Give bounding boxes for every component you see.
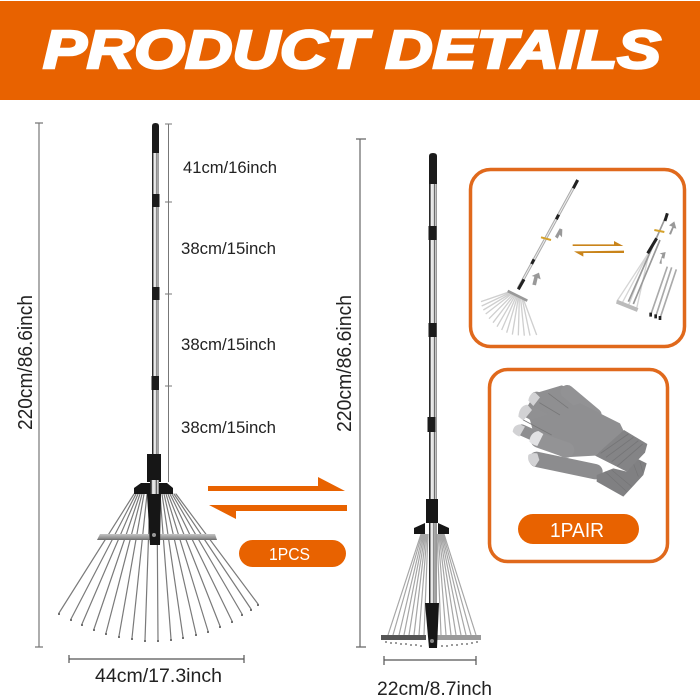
section dimension line <box>165 124 172 482</box>
width dimension 22cm <box>377 656 492 700</box>
left height dimension <box>15 123 43 647</box>
1PCS pill: 1PCS <box>269 544 310 564</box>
section length labels: 38cm/15inch <box>181 335 276 354</box>
expanded rake head bracket <box>134 454 173 545</box>
width dimension 44cm <box>69 655 244 687</box>
collapsed rake head bracket <box>414 499 449 648</box>
panel: gloves <box>490 370 668 562</box>
panel: telescoping usage <box>470 170 684 346</box>
expanded rake tines <box>59 494 258 640</box>
mini collapsed rake <box>617 213 676 320</box>
section length labels: 38cm/15inch <box>181 418 276 437</box>
section length labels: 41cm/16inch <box>183 158 277 177</box>
expanded rake pole <box>152 123 160 455</box>
swap arrows <box>208 477 347 519</box>
1PAIR pill: 1PAIR <box>550 520 604 542</box>
1PAIR pill <box>518 514 639 544</box>
section length labels <box>181 158 277 437</box>
expanded rake <box>59 123 258 642</box>
1PCS pill <box>239 540 346 567</box>
section length labels: 38cm/15inch <box>181 239 276 258</box>
collapsed rake cross bar <box>381 635 481 640</box>
gloves <box>513 385 647 497</box>
lower glove <box>528 453 647 497</box>
left height dimension: 220cm/86.6inch <box>15 295 37 430</box>
mini expanded rake <box>481 180 578 336</box>
expanded rake cross bar <box>97 534 217 540</box>
width dimension 44cm: 44cm/17.3inch <box>95 665 222 687</box>
right height dimension: 220cm/86.6inch <box>334 295 356 432</box>
collapsed rake tines <box>388 534 476 635</box>
collapsed rake <box>381 153 481 648</box>
collapsed rake pole <box>428 153 437 605</box>
upper glove <box>513 385 647 472</box>
title banner <box>0 1 700 100</box>
right height dimension <box>334 139 366 647</box>
title: PRODUCT DETAILS <box>43 20 661 80</box>
mini direction arrows <box>573 241 624 257</box>
width dimension 22cm: 22cm/8.7inch <box>377 679 492 700</box>
